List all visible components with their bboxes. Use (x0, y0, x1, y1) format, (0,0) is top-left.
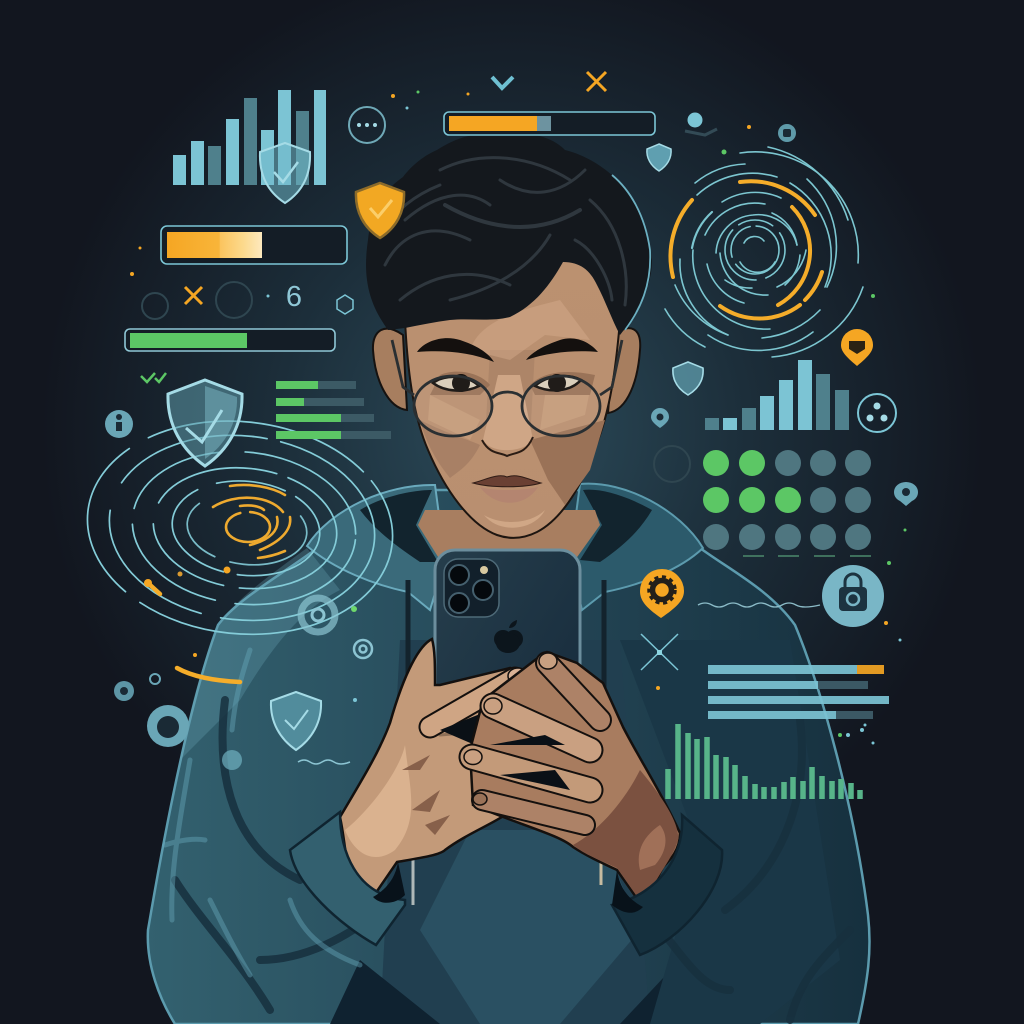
icon: orange location pin (841, 329, 873, 366)
icon: orange shield (356, 183, 404, 238)
left hand (340, 639, 530, 897)
icon: info badge (105, 410, 133, 438)
list bars right (708, 665, 889, 719)
icon: large shield left (168, 380, 242, 466)
right hand (464, 652, 680, 907)
icon: circle badge (147, 705, 189, 747)
apple logo (494, 620, 523, 653)
icon: network circle (858, 394, 896, 432)
icon: small heart pin (651, 408, 669, 428)
radial hud: left (77, 406, 403, 682)
progress bar: orange (161, 226, 347, 264)
hair (366, 133, 652, 335)
glasses (392, 340, 622, 436)
progress bar: green (125, 329, 335, 351)
radial hud: top right (665, 147, 863, 357)
ears (373, 328, 640, 413)
hair rim light (612, 175, 650, 330)
phone (435, 550, 580, 800)
hoodie highlights (165, 650, 360, 975)
icon: small ring (354, 640, 372, 658)
sleeve cuffs (290, 812, 722, 955)
right hand wrist shadow (573, 770, 678, 905)
hoodie strings (408, 580, 604, 905)
green list bars (276, 381, 391, 439)
hoodie folds (175, 700, 850, 1020)
cuff dark openings (373, 862, 643, 913)
icon: green double check (141, 373, 166, 382)
icon: left pin badge (114, 681, 134, 701)
dot matrix (703, 450, 871, 556)
hood (307, 484, 703, 610)
icon: orange x left (185, 287, 202, 304)
scattered dots (130, 90, 906, 744)
icon: chevron check (492, 77, 513, 88)
icon: small hex (337, 295, 353, 314)
icon: dots circle (349, 107, 385, 143)
bar chart: right (705, 360, 849, 430)
eyebrows (417, 338, 598, 362)
icon: small badge (778, 124, 796, 142)
face (405, 250, 620, 538)
hand highlights (345, 745, 411, 857)
number 6: 6 (286, 281, 302, 313)
progress bar: top (444, 112, 655, 135)
hair strands (380, 158, 626, 305)
icon: node top right (685, 112, 717, 135)
icon: faint circle (654, 446, 690, 482)
icon: shield on sleeve (271, 692, 321, 750)
camera module (444, 559, 499, 617)
hoodie torso panels (330, 640, 840, 1024)
icon: orange gear pin (640, 569, 684, 618)
icon: faint circles (142, 282, 252, 319)
icon: padlock (822, 565, 884, 627)
eyes (433, 374, 581, 392)
neck (418, 510, 600, 560)
hoodie shoulder highlight (180, 548, 340, 760)
icon: shield center right (673, 362, 703, 395)
mouth (473, 476, 541, 503)
face shading (420, 300, 605, 528)
icon: chat badge (894, 482, 918, 506)
bar chart: top left (173, 90, 326, 185)
icon: small ring left (150, 674, 160, 684)
icon: shield top left (260, 143, 310, 203)
icon: ring badge (301, 598, 335, 632)
green histogram (668, 724, 860, 799)
wave line (698, 603, 820, 607)
icon: orange x (587, 72, 606, 91)
nose (482, 437, 533, 456)
icon: small shield top center (647, 144, 671, 171)
icon: crosshair star (641, 634, 678, 670)
icon: sleeve badge (222, 750, 242, 770)
hoodie body (148, 490, 870, 1024)
wave line sleeve (298, 760, 350, 764)
